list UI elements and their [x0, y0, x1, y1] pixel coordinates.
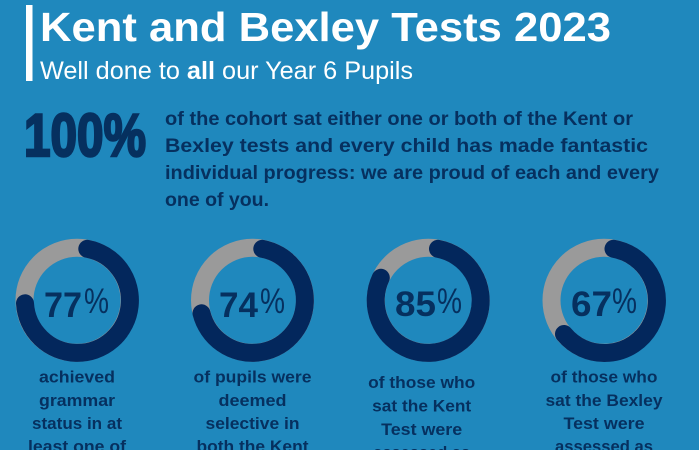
- cohort paragraph: of the cohort sat either one or both of the Kent or: [165, 109, 634, 130]
- value 74%: [219, 282, 285, 325]
- caption 67%: Test were: [564, 414, 644, 433]
- caption 67%: of those who: [550, 368, 658, 386]
- value 67%: 67: [571, 285, 612, 324]
- caption 77%: status in at: [32, 414, 122, 433]
- value 67%: %: [612, 282, 637, 321]
- cohort paragraph: Bexley tests and every child has made fantastic: [165, 136, 648, 157]
- caption 67%: [546, 368, 663, 450]
- caption 85%: of those who: [368, 373, 475, 392]
- caption 74%: selective in: [206, 414, 300, 433]
- caption 77%: achieved: [39, 368, 115, 386]
- caption 85%: Test were: [381, 420, 462, 439]
- caption 85%: [368, 373, 475, 450]
- donut chart 74%: [200, 248, 305, 353]
- donut chart 67%: [552, 248, 657, 353]
- cohort statement: [24, 102, 659, 211]
- value 85%: [395, 282, 462, 324]
- subtitle: Well done to all our Year 6 Pupils: [40, 57, 413, 85]
- donut chart 85%: [376, 248, 481, 353]
- big 100% figure: 100%: [24, 102, 146, 169]
- stat: 85%: [368, 248, 481, 450]
- caption 74%: deemed: [218, 391, 286, 410]
- title: Kent and Bexley Tests 2023: [40, 4, 611, 50]
- value 74%: %: [260, 282, 285, 321]
- stat: 77%: [24, 248, 130, 450]
- stat: 74%: [194, 248, 312, 450]
- value 77%: 77: [44, 286, 82, 325]
- cohort paragraph: individual progress: we are proud of each and every: [165, 163, 659, 184]
- caption 77%: grammar: [39, 391, 115, 410]
- donut chart 77%: [24, 248, 130, 353]
- caption 77%: [28, 368, 126, 450]
- cohort paragraph: one of you.: [165, 190, 269, 211]
- header: [26, 4, 611, 85]
- caption 74%: of pupils were: [194, 368, 312, 386]
- cohort paragraph: [165, 109, 659, 211]
- stat: 67%: [546, 248, 663, 450]
- caption 74%: [194, 368, 312, 450]
- value 77%: [44, 282, 109, 325]
- caption 85%: sat the Kent: [372, 396, 472, 416]
- value 77%: %: [84, 282, 109, 321]
- caption 67%: sat the Bexley: [546, 391, 663, 410]
- value 74%: 74: [219, 286, 259, 325]
- value 85%: %: [437, 282, 462, 321]
- header accent bar: [26, 5, 32, 81]
- value 85%: 85: [395, 285, 436, 324]
- value 67%: [571, 282, 637, 324]
